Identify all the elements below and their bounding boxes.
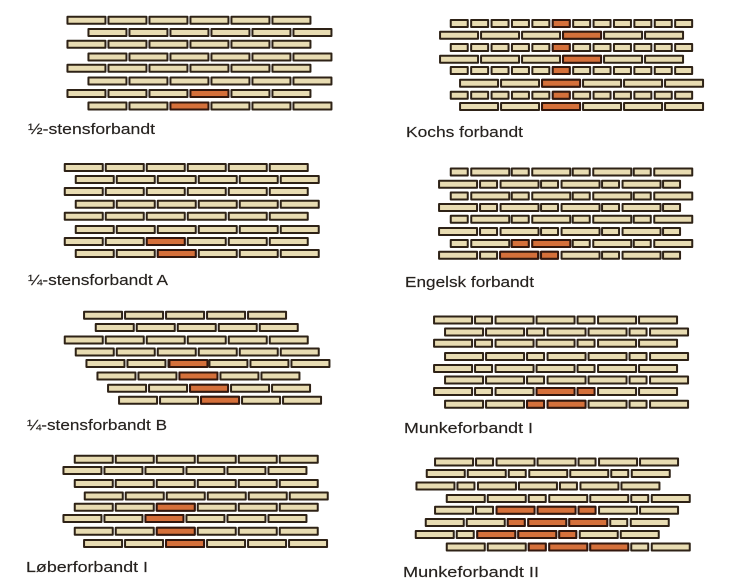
label: ¼-stensforbandt B: [27, 417, 167, 434]
brick wall: Munkeforbandt II: [416, 458, 690, 550]
highlighted bricks: [147, 238, 196, 257]
brick wall: kvartstensforbandt B: [65, 312, 329, 404]
highlighted bricks: [170, 90, 228, 109]
panel: Kochs forbandt: [406, 20, 703, 141]
highlighted bricks: [145, 504, 204, 547]
label: Engelsk forbandt: [405, 274, 535, 291]
panel: kvartstensforbandt A: [28, 164, 319, 289]
panel: Løberforbandt I: [26, 456, 328, 576]
brick wall: kvartstensforbandt A: [65, 164, 319, 257]
panel: Munkeforbandt I: [404, 316, 688, 437]
highlighted bricks: [477, 507, 628, 550]
panel: Munkeforbandt II: [403, 458, 690, 581]
highlighted bricks: [542, 20, 601, 110]
label: Munkeforbandt I: [404, 420, 533, 437]
label: Kochs forbandt: [406, 124, 524, 141]
panel: kvartstensforbandt B: [27, 312, 329, 434]
label: Munkeforbandt II: [403, 564, 539, 581]
brick wall: Munkeforbandt I: [434, 316, 688, 408]
highlighted bricks: [500, 240, 570, 259]
brick wall: Kochs forbandt: [440, 20, 703, 110]
panel: halvstensforbandt: [28, 17, 331, 138]
label: ½-stensforbandt: [28, 121, 156, 138]
brick wall: Løberforbandt I: [63, 456, 328, 547]
label: Løberforbandt I: [26, 559, 148, 576]
panel: Engelsk forbandt: [405, 168, 692, 291]
highlighted bricks: [527, 388, 595, 408]
label: ¼-stensforbandt A: [28, 272, 168, 289]
brick wall: Engelsk forbandt: [439, 168, 692, 259]
highlighted bricks: [169, 360, 239, 404]
brick wall: halvstensforbandt: [67, 17, 331, 109]
